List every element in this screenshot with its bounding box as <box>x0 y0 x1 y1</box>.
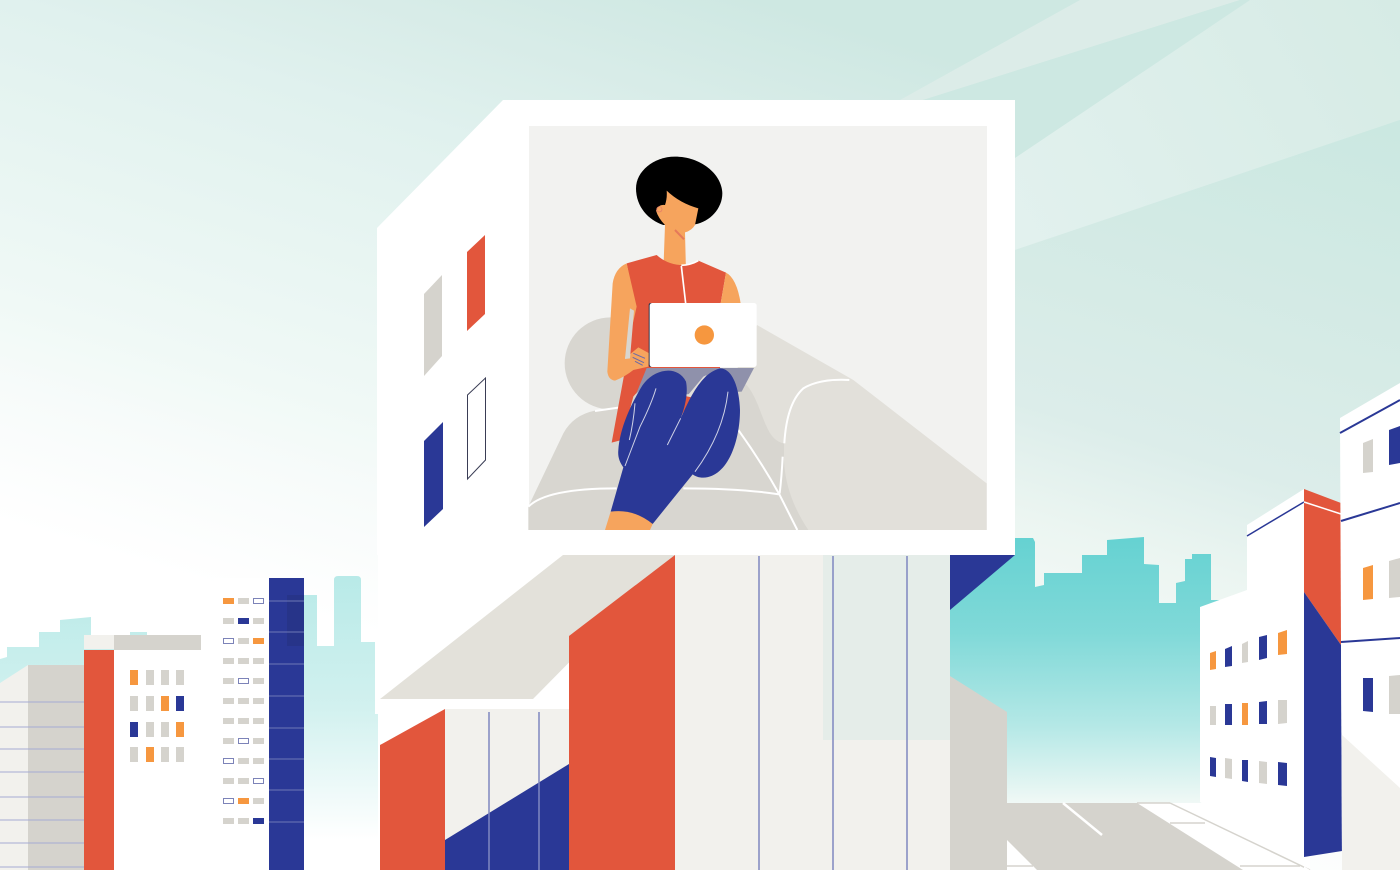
skyline left <box>0 576 382 840</box>
head and neck <box>656 191 698 272</box>
windows: right block <box>1210 630 1287 786</box>
side windows <box>424 235 486 527</box>
main building upper section <box>377 100 1015 555</box>
dress <box>612 255 726 443</box>
sofa <box>528 317 987 530</box>
arms <box>607 263 741 381</box>
roof slab <box>380 555 675 699</box>
person on sofa illustration <box>528 157 987 530</box>
building: far right block <box>1340 383 1400 870</box>
windows: left block <box>130 670 184 762</box>
building: left white block with red edge <box>84 635 214 870</box>
skyline right <box>950 537 1220 805</box>
building: tower with blue side <box>214 578 304 870</box>
building: far left grey block <box>0 665 84 870</box>
windows: far right block <box>1363 426 1400 714</box>
building: right white block <box>1200 489 1342 870</box>
main building lower section <box>378 555 1015 870</box>
windows: tower <box>223 598 264 824</box>
laptop <box>633 303 757 398</box>
road <box>1007 803 1310 870</box>
hair <box>636 157 722 225</box>
foot <box>605 511 653 530</box>
legs <box>611 368 740 524</box>
